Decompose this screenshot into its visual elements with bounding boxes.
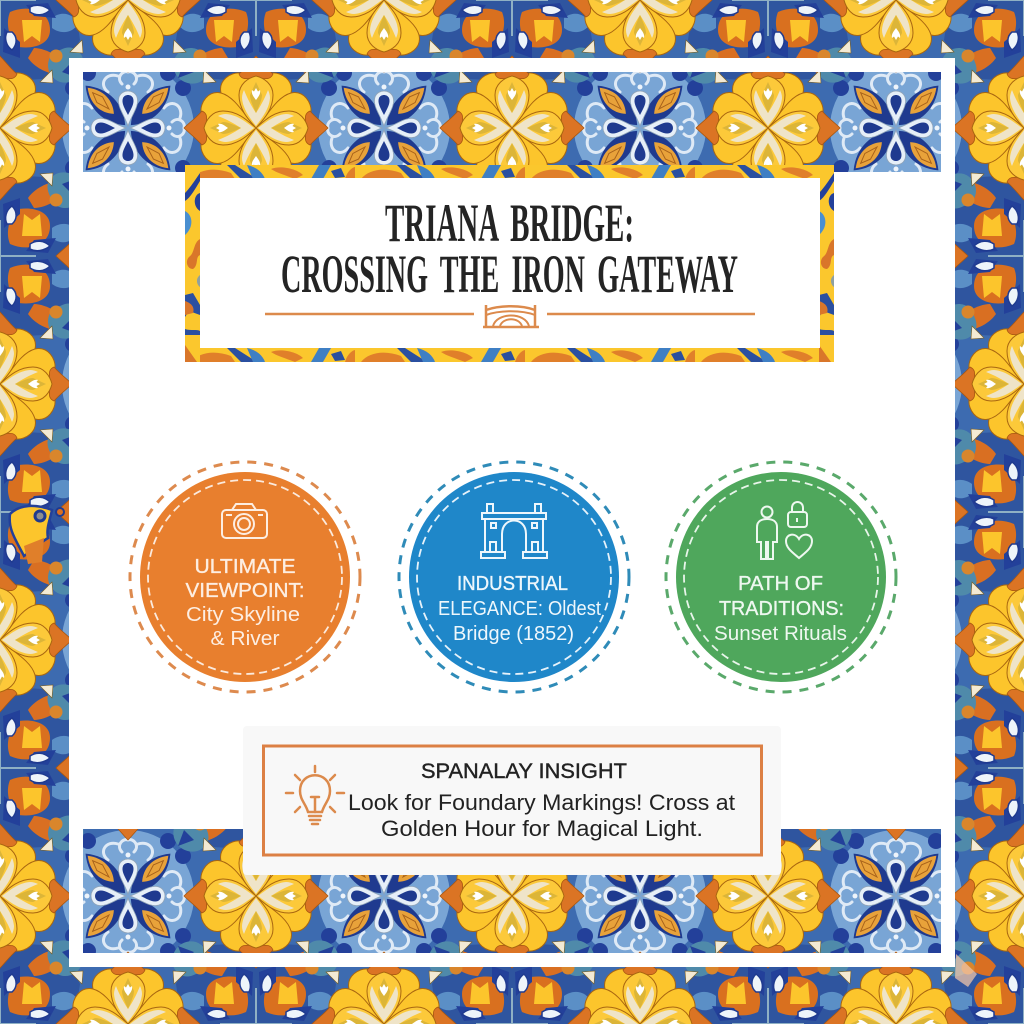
title plaque (185, 165, 834, 362)
badge text: & River (210, 628, 280, 650)
divider with bridge icon (265, 305, 755, 327)
icon: arch gateway (481, 504, 547, 558)
badge: industrial elegance (399, 462, 629, 692)
title: TRIANA BRIDGE: (385, 193, 634, 253)
callout body: Look for Foundary Markings! Cross at (348, 790, 735, 815)
callout: spanalay insight (243, 726, 781, 875)
callout body (348, 790, 735, 841)
panel: top tile band (83, 72, 941, 172)
badge text: TRADITIONS: (719, 598, 844, 620)
panel: bottom tile band (83, 829, 941, 953)
badge text: VIEWPOINT: (186, 580, 304, 602)
badge text: INDUSTRIAL (457, 573, 568, 595)
badge text: Sunset Rituals (714, 623, 847, 645)
badge: ultimate viewpoint (130, 462, 360, 692)
icon: peach corner watermark (955, 954, 977, 987)
icon: left edge ornament blot (10, 506, 64, 564)
badge text: Bridge (1852) (453, 623, 574, 645)
icon: person, lock and heart (757, 502, 812, 559)
badge text: ELEGANCE: Oldest (438, 598, 601, 620)
callout heading: SPANALAY INSIGHT (421, 760, 627, 783)
icon: light bulb (286, 766, 344, 824)
panel: white frame (69, 58, 955, 967)
badge text: ULTIMATE (194, 556, 296, 578)
badge text (714, 573, 847, 645)
callout body: Golden Hour for Magical Light. (381, 816, 703, 841)
badge text (438, 573, 601, 645)
badge text: PATH OF (738, 573, 823, 595)
badge text (186, 556, 304, 650)
icon: camera (222, 504, 267, 538)
badge: path of traditions (666, 462, 896, 692)
title (281, 193, 738, 304)
badge text: City Skyline (186, 604, 300, 626)
